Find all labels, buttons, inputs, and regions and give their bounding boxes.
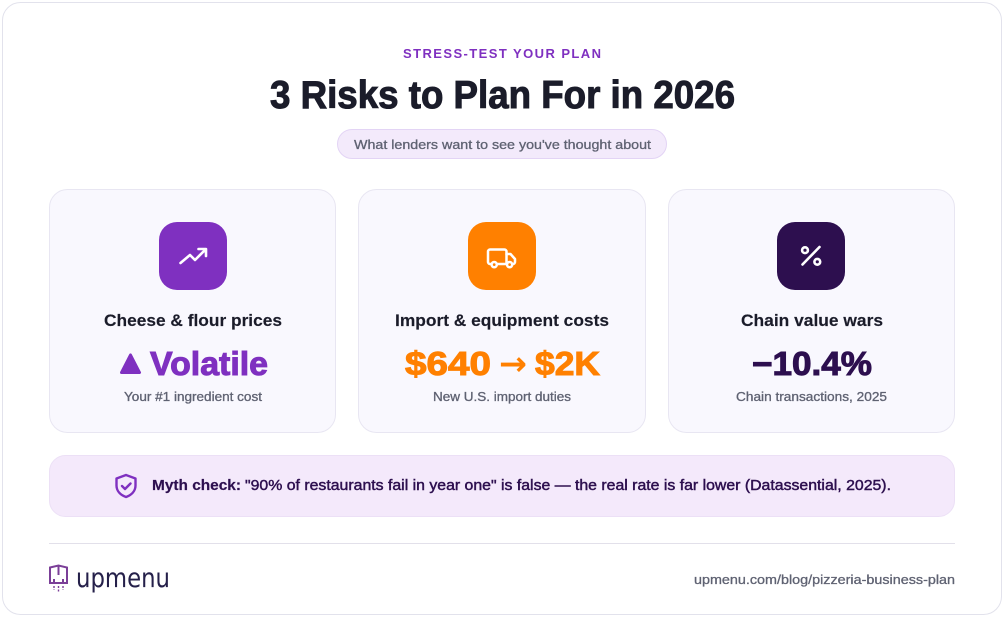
icon: menu book [50,566,67,593]
panel: import and equipment costs [358,190,646,432]
heading: Cheese & flour prices [104,311,282,330]
myth text: Myth check: [152,478,241,494]
heading: Chain value wars [741,311,883,330]
eyebrow: STRESS-TEST YOUR PLAN [403,46,601,61]
icon: percent [777,222,845,290]
subtitle pill: What lenders want to see you've thought about [354,137,651,152]
stat: transactions change: −10.4% [752,345,872,382]
caption: Chain transactions, 2025 [736,390,887,404]
caption: Your #1 ingredient cost [124,390,263,404]
stat: cost change: $640 [405,345,491,382]
wordmark: upmenu [76,563,170,594]
stat: cost change [405,344,600,383]
stat: cost change: $2K [535,345,600,382]
heading: Import & equipment costs [395,311,609,330]
icon: trending up [159,222,227,290]
icon: truck [468,222,536,290]
source url: upmenu.com/blog/pizzeria-business-plan [694,572,955,587]
icon: warning triangle [122,355,140,372]
panel: chain value wars [668,190,954,432]
stat: cost change: → [499,344,527,383]
caption: New U.S. import duties [433,390,571,404]
icon: shield check [116,475,136,497]
callout: myth check [50,456,954,516]
title: 3 Risks to Plan For in 2026 [270,74,735,117]
myth text: "90% of restaurants fail in year one" is false — the real rate is far lower (Datassential, 2025). [245,478,891,494]
panel: cheese and flour prices [50,190,336,432]
subtitle pill [338,130,666,158]
stat: volatile: Volatile [150,345,268,382]
logo: upmenu [50,563,170,594]
